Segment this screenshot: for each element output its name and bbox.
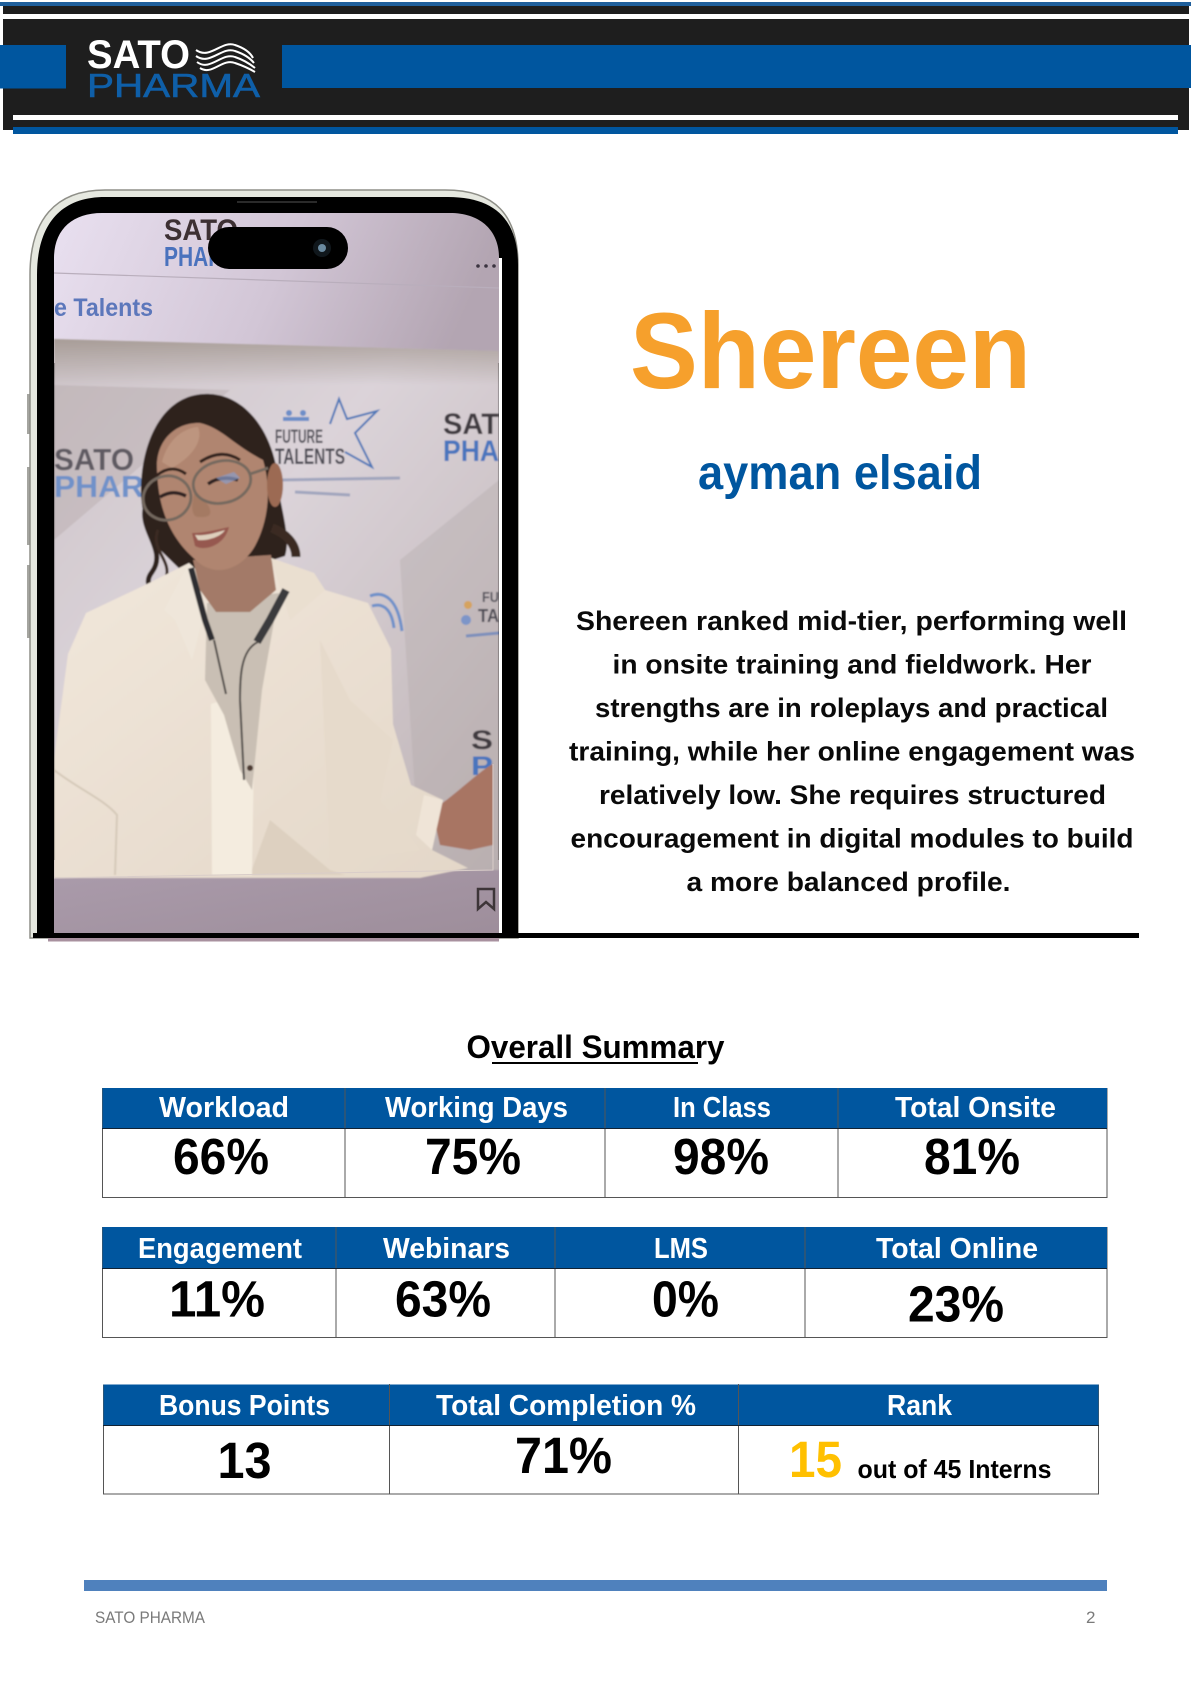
- footer bar: [84, 1580, 1107, 1591]
- photo: phone screen contents: PHARMA: [164, 241, 256, 272]
- caption: out of 45 Interns: out of 45 Interns: [858, 1454, 1052, 1484]
- summary paragraph: relatively low. She requires structured: [599, 780, 1106, 810]
- photo: phone screen contents: [54, 213, 499, 942]
- logo: Sato Pharma: [87, 33, 260, 104]
- value: Engagement 11%: 11%: [169, 1270, 265, 1328]
- summary paragraph: strengths are in roleplays and practical: [595, 693, 1108, 723]
- photo: phone screen contents: TALENTS: [275, 444, 345, 469]
- section heading: Overall Summary: Overall Summary: [466, 1029, 725, 1065]
- header: Workload: Workload: [159, 1092, 289, 1124]
- photo: phone screen contents: FUTURE: [275, 427, 323, 448]
- footer label: SATO PHARMA: [95, 1608, 206, 1627]
- phone mockup with photo: [30, 190, 518, 942]
- icon: bookmark: [478, 889, 494, 909]
- person: neckband headphones: [191, 568, 212, 640]
- photo: phone screen contents: P: [471, 751, 493, 781]
- phone screen title: e Talents: [54, 294, 153, 322]
- person: hair back: [141, 394, 287, 585]
- header: Rank: Rank: [887, 1390, 953, 1422]
- header: Total Onsite: Total Onsite: [895, 1092, 1056, 1124]
- header: LMS: LMS: [654, 1233, 708, 1265]
- photo: phone screen contents: PHA: [443, 435, 499, 468]
- person: shirt: [54, 558, 468, 878]
- logo: Sato Pharma: PHARMA: [87, 67, 260, 104]
- table: onsite summary: [102, 1088, 1107, 1198]
- value: Total Online 23%: 23%: [908, 1276, 1004, 1332]
- backdrop logos: SATO: [54, 442, 134, 477]
- person: hand: [432, 764, 493, 850]
- phone side buttons: [27, 394, 30, 638]
- header: In Class: In Class: [673, 1092, 771, 1124]
- header: Bonus Points: Bonus Points: [159, 1390, 330, 1422]
- summary paragraph: Shereen ranked mid-tier, performing well: [576, 606, 1127, 636]
- summary paragraph: encouragement in digital modules to build: [570, 824, 1134, 854]
- summary paragraph: training, while her online engagement was: [569, 736, 1135, 766]
- table: completion and rank: [103, 1384, 1099, 1494]
- name heading: Shereen: [630, 290, 1031, 411]
- photo: phone screen contents: TA: [478, 606, 499, 626]
- value: Total Completion 71%: 71%: [515, 1427, 612, 1484]
- value: Working Days 75%: 75%: [425, 1128, 521, 1185]
- page number: 2: [1086, 1608, 1095, 1627]
- phone camera island: [208, 227, 348, 269]
- photo: phone screen contents: SATO: [164, 214, 238, 247]
- photo: phone screen contents: SAT: [443, 408, 499, 441]
- photo: phone screen contents: PHAR: [54, 469, 144, 504]
- header band: [0, 2, 1191, 134]
- summary paragraph: [569, 606, 1135, 897]
- surname subheading: ayman elsaid: [698, 447, 982, 500]
- person: neck and tee: [205, 593, 279, 790]
- value: rank 15: 15: [789, 1431, 842, 1488]
- value: Total Onsite 81%: 81%: [924, 1128, 1020, 1185]
- value: LMS 0%: 0%: [652, 1270, 719, 1328]
- header: Working Days: Working Days: [385, 1092, 568, 1124]
- value: Workload 66%: 66%: [173, 1128, 269, 1185]
- summary paragraph: a more balanced profile.: [686, 867, 1010, 897]
- value: Bonus Points 13: 13: [218, 1432, 272, 1489]
- header: Total Online: Total Online: [876, 1233, 1038, 1265]
- value: In Class 98%: 98%: [673, 1128, 769, 1185]
- value: Webinars 63%: 63%: [395, 1270, 491, 1328]
- photo: phone screen contents: S: [471, 725, 493, 755]
- header: Webinars: Webinars: [383, 1233, 510, 1265]
- photo: phone screen contents: FU: [482, 589, 499, 606]
- header: Total Completion %: Total Completion %: [436, 1390, 696, 1422]
- divider line under phone: [33, 933, 1139, 942]
- table: online summary: [102, 1227, 1107, 1338]
- header: Engagement: Engagement: [138, 1233, 302, 1265]
- person: face: [157, 423, 268, 570]
- logo: Sato Pharma: SATO: [87, 33, 190, 77]
- summary paragraph: in onsite training and fieldwork. Her: [612, 650, 1092, 680]
